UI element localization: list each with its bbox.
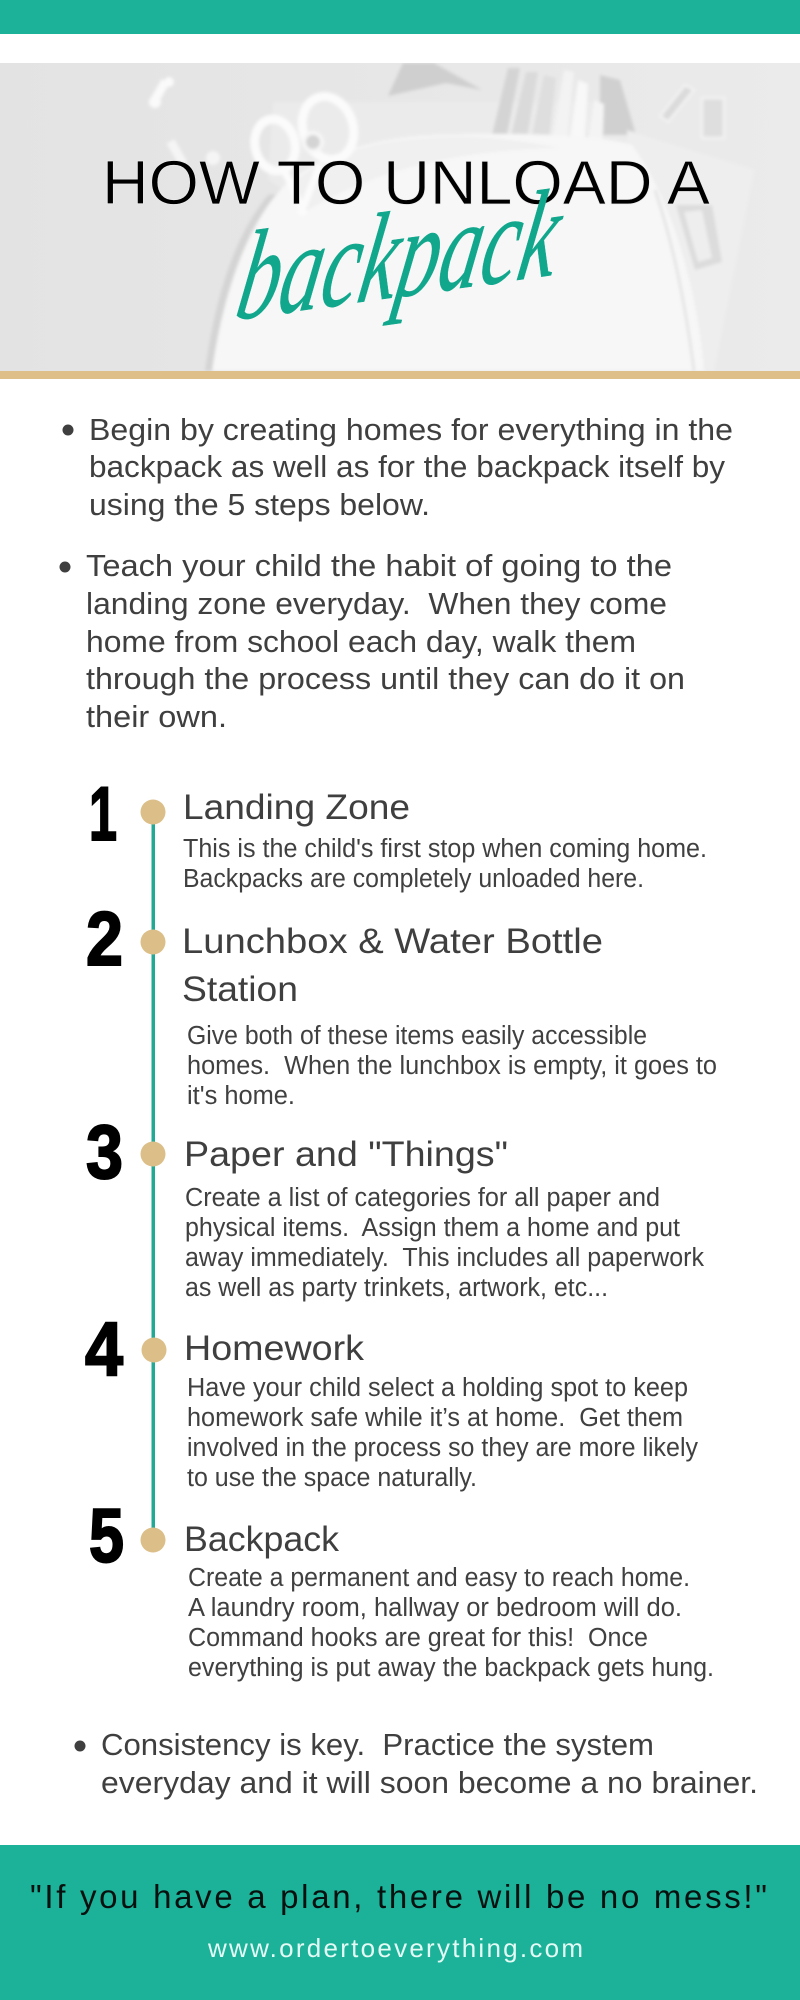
script word: backpack: backpack — [228, 161, 574, 348]
step 4: homework: homework safe while it’s at home. Get them — [187, 1404, 683, 1432]
step 1: landing zone: Landing Zone — [183, 788, 410, 827]
step 3: paper and things: physical items. Assign them a home and put — [185, 1214, 680, 1242]
step 3: paper and things: away immediately. This includes all paperwork — [185, 1244, 704, 1272]
step 1: landing zone: Backpacks are completely unloaded here. — [183, 865, 644, 893]
step 2: lunchbox and water bottle station: Station — [182, 970, 298, 1009]
intro bullet 2: landing zone everyday. When they come — [86, 586, 667, 621]
intro bullet 1 — [62, 412, 733, 522]
step 4: homework: 4 — [85, 1307, 123, 1392]
step 3: paper and things: 3 — [86, 1110, 123, 1195]
step 4: homework — [85, 1307, 698, 1492]
step 5: backpack — [89, 1494, 714, 1682]
closing bullet: Consistency is key. Practice the system — [101, 1727, 654, 1762]
step 2: lunchbox and water bottle station — [86, 897, 717, 1110]
intro bullet 2: Teach your child the habit of going to the — [86, 548, 672, 583]
step 2: lunchbox and water bottle station: it's home. — [187, 1082, 295, 1110]
step 5: backpack: everything is put away the backpack gets hung. — [188, 1654, 714, 1682]
step 4: homework: Homework — [184, 1329, 365, 1368]
step 5: backpack: A laundry room, hallway or bedroom will do. — [188, 1594, 682, 1622]
footer website: www.ordertoeverything.com — [207, 1933, 583, 1963]
step 1: landing zone — [89, 772, 707, 893]
step 3: paper and things — [86, 1110, 704, 1302]
step 5: backpack: 5 — [89, 1494, 124, 1579]
step 2: lunchbox and water bottle station: Lunchbox & Water Bottle — [182, 922, 603, 961]
intro bullet 2: their own. — [86, 699, 227, 734]
step 4: homework: Have your child select a holding spot to keep — [187, 1374, 688, 1402]
step 5: backpack: Backpack — [184, 1520, 340, 1559]
closing bullet: everyday and it will soon become a no brainer. — [101, 1765, 758, 1800]
closing bullet — [74, 1727, 758, 1800]
step 4: homework: to use the space naturally. — [187, 1464, 477, 1492]
step 1: landing zone: 1 — [89, 772, 117, 857]
step 5: backpack: Create a permanent and easy to reach home. — [188, 1564, 690, 1592]
tan divider under hero — [0, 371, 800, 379]
step 1: landing zone: This is the child's first stop when coming home. — [183, 835, 707, 863]
intro bullet 1: using the 5 steps below. — [89, 487, 430, 522]
step 3: paper and things: as well as party trinkets, artwork, etc... — [185, 1274, 608, 1302]
intro bullet 2 — [60, 548, 685, 734]
intro bullet 1: Begin by creating homes for everything in the — [89, 412, 733, 447]
step 2: lunchbox and water bottle station: Give both of these items easily accessible — [187, 1022, 647, 1050]
intro bullet 2: through the process until they can do it on — [86, 661, 685, 696]
step 2: lunchbox and water bottle station: 2 — [86, 897, 123, 982]
top teal band — [0, 0, 800, 34]
footer band — [0, 1845, 800, 2000]
title line: how to unload a: HOW TO UNLOAD A — [102, 149, 711, 218]
intro bullet 2: home from school each day, walk them — [86, 624, 636, 659]
step 2: lunchbox and water bottle station: homes. When the lunchbox is empty, it goes to — [187, 1052, 717, 1080]
footer quote: "If you have a plan, there will be no mess!" — [30, 1878, 767, 1915]
timeline connector line — [152, 812, 155, 1540]
hero photo: backpack with school supplies — [0, 63, 800, 371]
step 4: homework: involved in the process so they are more likely — [187, 1434, 698, 1462]
step 3: paper and things: Paper and "Things" — [184, 1135, 508, 1174]
title — [102, 149, 711, 348]
step 3: paper and things: Create a list of categories for all paper and — [185, 1184, 660, 1212]
step 5: backpack: Command hooks are great for this! Once — [188, 1624, 648, 1652]
intro bullet 1: backpack as well as for the backpack itself by — [89, 449, 726, 484]
